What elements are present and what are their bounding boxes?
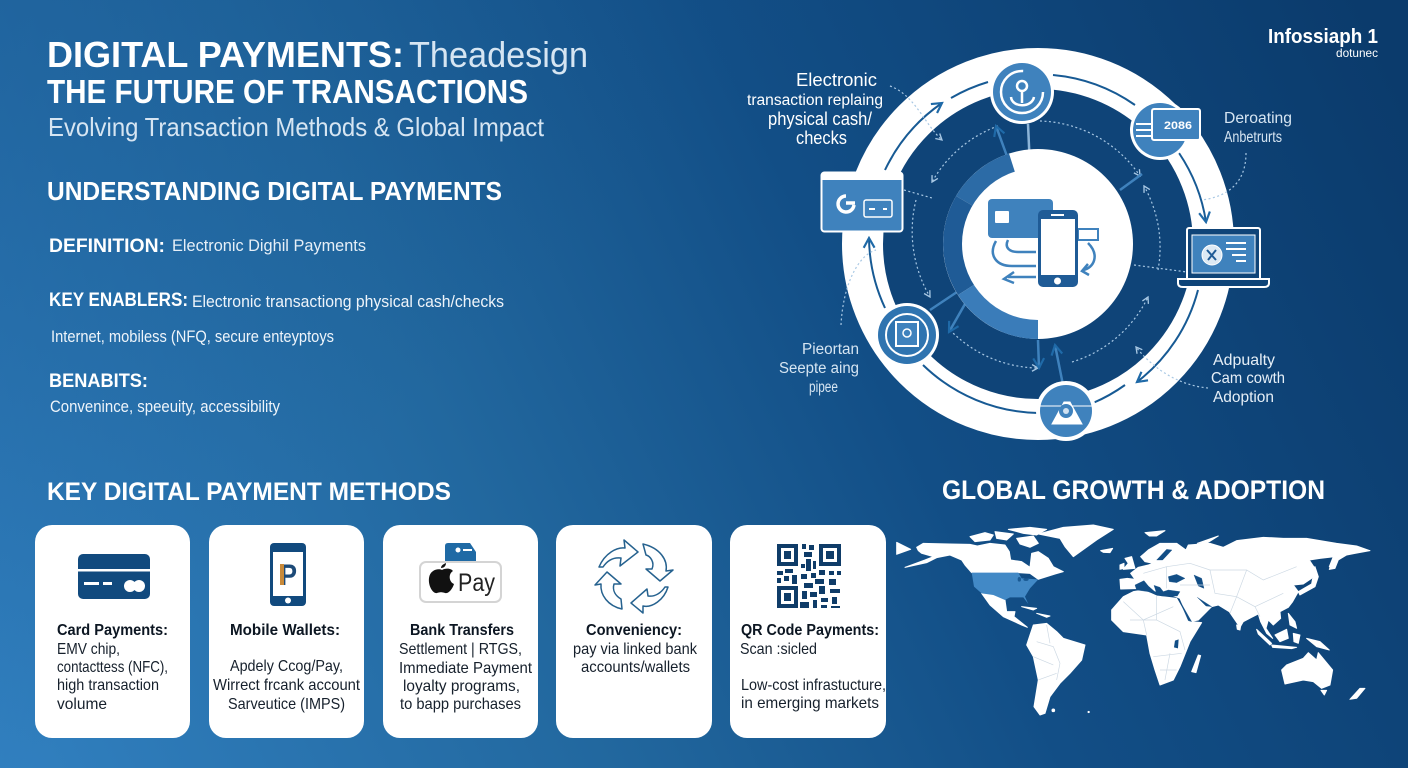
text: Bank Transfers <box>410 622 514 639</box>
callout: bottom right: Adoption <box>1213 389 1274 406</box>
logo text <box>1268 26 1378 60</box>
text: pay via linked bank <box>573 641 698 658</box>
text <box>740 622 886 712</box>
panel: card payments <box>35 525 190 738</box>
text: Sarveutice (IMPS) <box>228 696 345 713</box>
text: Mobile Wallets: <box>230 622 340 639</box>
icon: phone <box>270 543 306 606</box>
heading: key digital payment methods: KEY DIGITAL PAYMENT METHODS <box>47 478 451 506</box>
callout: electronic transaction: physical cash/ <box>768 109 872 129</box>
africa <box>1112 590 1202 685</box>
icon node: laptop <box>1178 228 1269 287</box>
text: accounts/wallets <box>581 659 690 676</box>
icon: card and phone <box>988 199 1098 287</box>
callout: electronic transaction: checks <box>796 128 847 148</box>
connector arrows <box>930 124 1142 385</box>
icon node: top <box>990 60 1054 124</box>
panel: bank transfers <box>383 525 538 738</box>
callout leader lines <box>841 86 1246 388</box>
world map <box>897 525 1370 715</box>
title: THE FUTURE OF TRANSACTIONS <box>47 73 528 110</box>
icon: cycle arrows <box>595 540 673 613</box>
text: high transaction <box>57 677 159 694</box>
callout: bottom left <box>779 341 859 396</box>
callout: top right: Anbetrurts <box>1224 129 1282 146</box>
definition: Electronic Dighil Payments <box>172 236 366 255</box>
icon node: bottom <box>1036 381 1096 441</box>
text: Conveniency: <box>586 622 682 639</box>
icon node: top right: 2086 <box>1164 120 1192 132</box>
definition: DEFINITION: <box>49 236 165 257</box>
text: Apdely Ccog/Pay, <box>230 658 343 675</box>
definition <box>49 236 366 257</box>
text: Low-cost infrastucture, <box>741 677 886 694</box>
icon node: bottom left <box>875 303 939 367</box>
icon: pay badge <box>420 543 501 602</box>
text: Card Payments: <box>57 622 168 639</box>
key enablers: Internet, mobiless (NFQ, secure enteyptoys <box>51 327 334 346</box>
text: volume <box>57 696 107 713</box>
panel: qr code payments <box>730 525 886 738</box>
text: Settlement | RTGS, <box>399 641 522 658</box>
text: contacttess (NFC), <box>57 659 168 676</box>
text: QR Code Payments: <box>741 622 879 639</box>
key enablers: Electronic transactiong physical cash/checks <box>192 292 504 311</box>
callout: bottom left: Seepte aing <box>779 360 859 377</box>
south america <box>1027 623 1085 715</box>
eurasia <box>1120 537 1370 638</box>
benefits: BENABITS: <box>49 371 148 392</box>
icon: pay badge: Pay <box>458 569 495 597</box>
subtitle: Evolving Transaction Methods & Global Impact <box>48 112 545 142</box>
north america <box>897 525 1113 627</box>
circular diagram <box>747 60 1292 441</box>
icon: phone: P <box>280 559 297 592</box>
text: in emerging markets <box>741 695 879 712</box>
islands <box>1052 531 1365 713</box>
inner dashed arrows <box>904 121 1187 368</box>
panel: understanding digital payments <box>47 176 504 416</box>
icon node: top right <box>1130 100 1200 160</box>
heading: global growth and adoption: GLOBAL GROWTH & ADOPTION <box>942 475 1325 505</box>
panel: mobile wallets <box>209 525 364 738</box>
title: DIGITAL PAYMENTS: <box>47 34 404 75</box>
text: Scan :sicled <box>740 641 817 658</box>
callout: bottom left: Pieortan <box>802 341 859 358</box>
key enablers <box>49 290 504 346</box>
benefits <box>49 371 280 416</box>
key enablers: KEY ENABLERS: <box>49 290 188 311</box>
inner segmented ring <box>943 149 1133 339</box>
title: Theadesign <box>409 34 588 75</box>
text: loyalty programs, <box>403 678 520 695</box>
usa highlighted <box>972 573 1038 604</box>
center white disc <box>962 168 1114 320</box>
callout: bottom right <box>1211 352 1285 406</box>
icon: qr code <box>777 544 841 608</box>
callout: top right: Deroating <box>1224 110 1292 127</box>
text <box>213 622 361 713</box>
logo text: dotunec <box>1336 46 1378 60</box>
callout: electronic transaction: transaction replaing <box>747 92 883 109</box>
callout: top right <box>1224 110 1292 146</box>
ring arrows <box>869 75 1206 413</box>
text: to bapp purchases <box>400 696 521 713</box>
text: EMV chip, <box>57 641 120 658</box>
panel: conveniency <box>556 525 712 738</box>
text: Wirrect frcank account <box>213 677 361 694</box>
icon node: browser card <box>822 172 902 232</box>
text: Immediate Payment <box>399 660 533 677</box>
callout: bottom left: pipee <box>809 379 838 396</box>
benefits: Convenince, speeuity, accessibility <box>50 397 280 416</box>
callout: electronic transaction: Electronic <box>796 70 877 90</box>
icon: credit card <box>78 554 150 599</box>
callout: bottom right: Cam cowth <box>1211 370 1285 387</box>
outer white ring <box>862 68 1214 420</box>
text <box>399 622 533 713</box>
logo text: Infossiaph 1 <box>1268 26 1378 48</box>
title <box>47 34 588 110</box>
heading: UNDERSTANDING DIGITAL PAYMENTS <box>47 176 502 206</box>
callout: electronic transaction <box>747 70 883 148</box>
text <box>573 622 698 676</box>
callout: bottom right: Adpualty <box>1213 352 1275 369</box>
text <box>57 622 168 713</box>
